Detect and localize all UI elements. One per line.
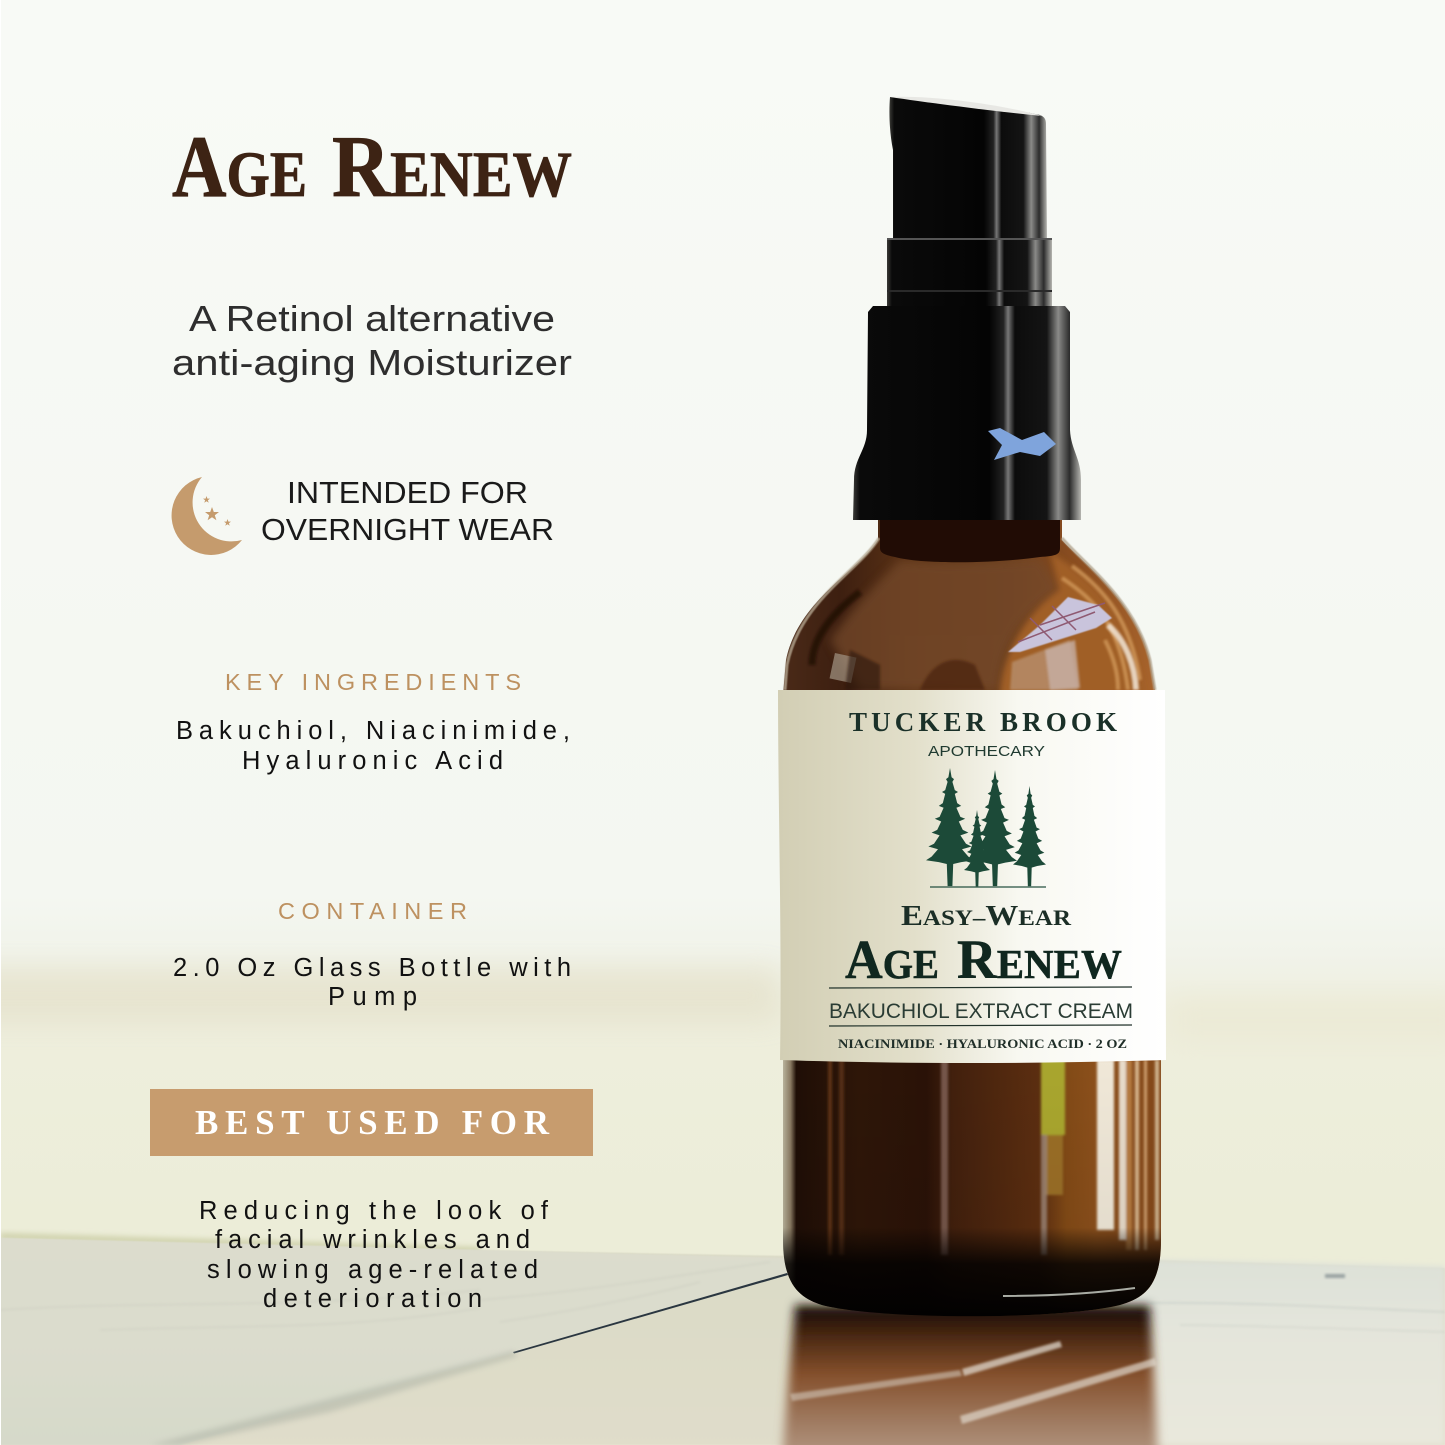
subtitle [172, 298, 572, 383]
easy-wear: EASY– WEAR [901, 900, 1072, 932]
product name [845, 929, 1122, 990]
icon: pine trees [926, 768, 1046, 888]
title: RENEW [332, 119, 572, 216]
subtitle: A Retinol alternative [189, 298, 555, 339]
container text: 2.0 Oz Glass Bottle with [173, 954, 571, 982]
product name: AGE [845, 929, 939, 990]
overnight wear text: OVERNIGHT WEAR [261, 512, 554, 547]
bottle label [778, 690, 1166, 1063]
best used for text: slowing age-related [207, 1256, 538, 1284]
cap highlight [988, 428, 1056, 460]
neck shadow [880, 518, 1060, 562]
pump collar [887, 238, 1052, 306]
best used for text: facial wrinkles and [215, 1226, 530, 1254]
cream descriptor: BAKUCHIOL EXTRACT CREAM [829, 999, 1133, 1023]
icon: crescent moon with stars [172, 477, 242, 555]
best used for banner: BEST USED FOR [195, 1103, 550, 1142]
subtitle: anti-aging Moisturizer [172, 342, 572, 383]
overnight wear text: INTENDED FOR [287, 475, 528, 510]
key ingredients text: Bakuchiol, Niacinimide, [176, 717, 570, 745]
vertical highlights on glass [828, 1060, 1159, 1255]
ingredients line: NIACINIMIDE · HYALURONIC ACID · 2 OZ [838, 1037, 1127, 1051]
pump base cap [853, 306, 1081, 520]
key ingredients heading: KEY INGREDIENTS [225, 669, 521, 695]
key ingredients text: Hyaluronic Acid [242, 747, 503, 775]
bottle base shadow [783, 1055, 1161, 1316]
glass edge highlights [785, 538, 1155, 690]
best used for text: deterioration [263, 1285, 482, 1313]
key ingredients text [176, 717, 570, 775]
product bottle [783, 97, 1161, 1316]
best used for text [199, 1197, 549, 1313]
container text: Pump [328, 983, 417, 1011]
lower bottle body [783, 1055, 1161, 1316]
pump top [889, 97, 1047, 240]
brand name: TUCKER BROOK [849, 707, 1117, 737]
shoulder reflections [812, 552, 1145, 695]
container text [173, 954, 571, 1011]
overnight wear text [261, 475, 554, 547]
bottle glass shoulder [783, 518, 1156, 695]
bottle reflection on table [782, 1305, 1158, 1445]
best used for text: Reducing the look of [199, 1197, 549, 1225]
best used for banner [150, 1089, 593, 1156]
divider lines [829, 987, 1132, 1026]
title [172, 119, 572, 216]
title: AGE [172, 119, 307, 216]
apothecary: APOTHECARY [928, 744, 1045, 760]
product name: RENEW [957, 929, 1122, 990]
container heading: CONTAINER [278, 898, 467, 924]
